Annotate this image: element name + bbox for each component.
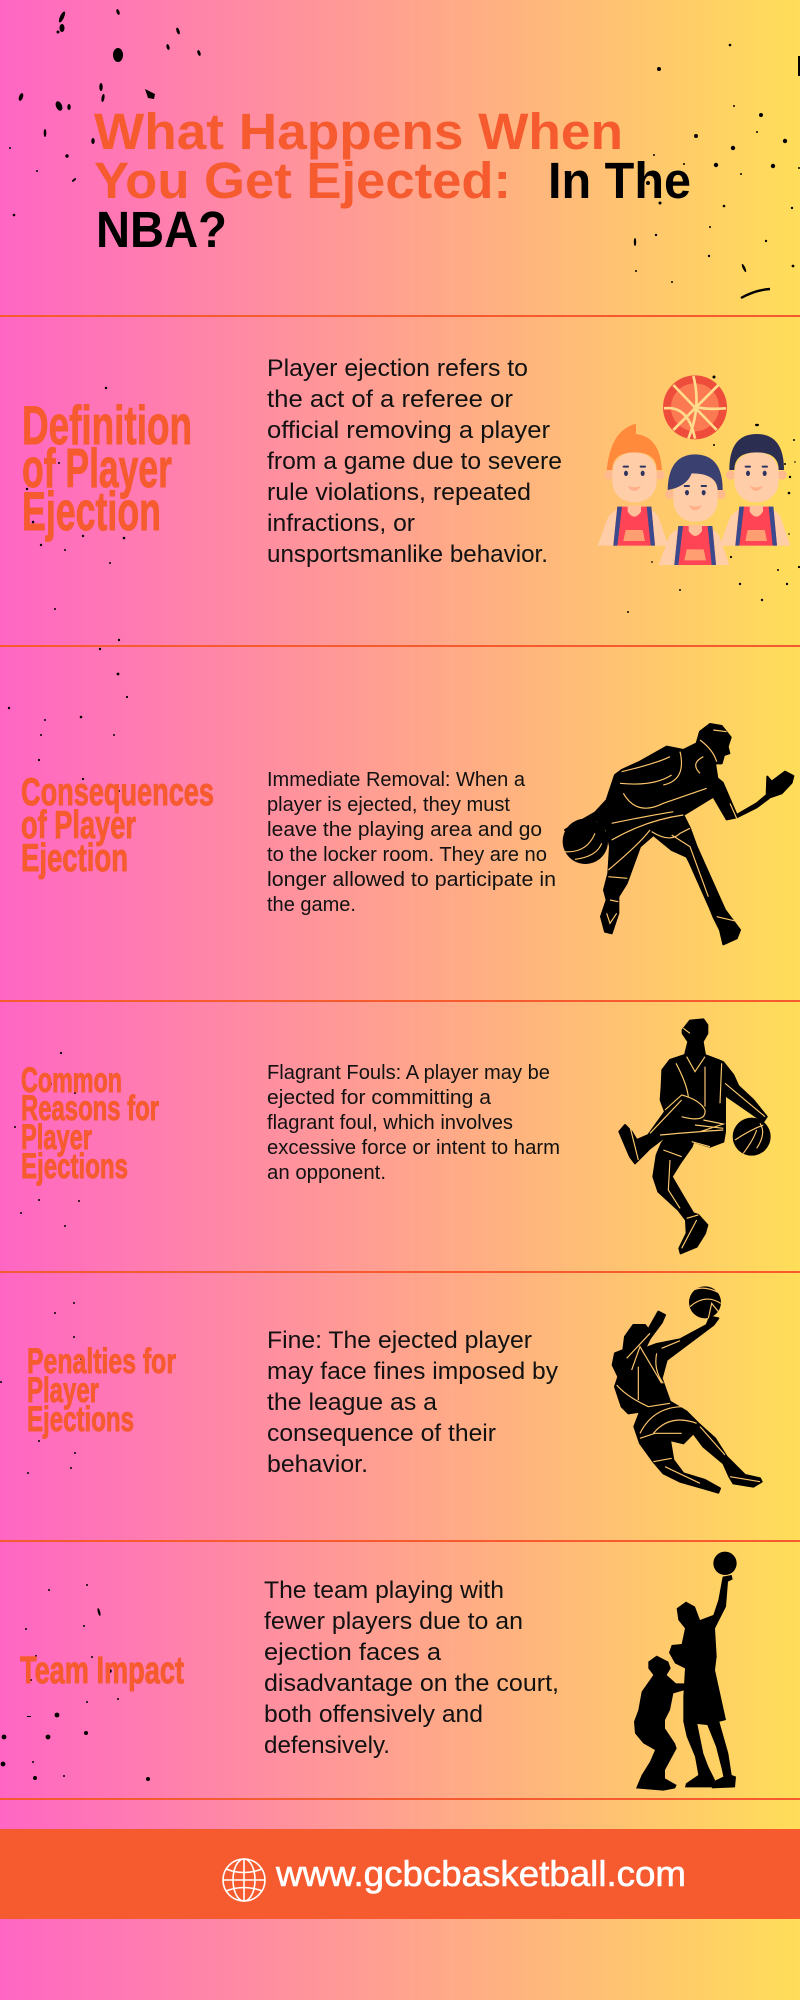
- text block: fine: Fine: The ejected player: [267, 1327, 532, 1354]
- heading: penalties: [27, 1342, 176, 1439]
- icon: player leaping for the ball: [613, 1286, 762, 1493]
- text block: definition: from a game due to severe: [267, 448, 562, 475]
- section divider lines: [0, 315, 800, 1800]
- title: NBA?: [96, 201, 227, 258]
- text block: flagrant fouls: excessive force or intent to harm: [267, 1137, 560, 1159]
- heading: common reasons: Player: [21, 1118, 92, 1157]
- text block: team impact: disadvantage on the court,: [264, 1670, 559, 1697]
- text block: team impact: defensively.: [264, 1732, 390, 1759]
- text block: consequences: leave the playing area and go: [267, 819, 542, 841]
- heading: definition: Ejection: [22, 480, 161, 542]
- heading: consequences: Ejection: [21, 837, 128, 880]
- heading: common reasons: Reasons for: [21, 1089, 159, 1128]
- heading: definition: [22, 394, 192, 542]
- title: In The: [548, 152, 691, 209]
- text block: flagrant fouls: an opponent.: [267, 1162, 386, 1184]
- text block: consequences: the game.: [267, 894, 356, 916]
- text block: team impact: ejection faces a: [264, 1639, 442, 1666]
- icon: dribbling player silhouette: [563, 724, 793, 944]
- text block: definition: infractions, or: [267, 510, 415, 537]
- text block: consequences: Immediate Removal: When a: [267, 769, 526, 791]
- text block: team impact: both offensively and: [264, 1701, 483, 1728]
- text block: flagrant fouls: Flagrant Fouls: A player may be: [267, 1062, 550, 1084]
- text block: definition: Player ejection refers to: [267, 355, 528, 382]
- heading: team impact: Team Impact: [20, 1650, 184, 1692]
- text block: flagrant fouls: flagrant foul, which involves: [267, 1112, 513, 1134]
- text block: fine: the league as a: [267, 1389, 438, 1416]
- panel: team impact: [20, 1552, 737, 1791]
- heading: common reasons: Common: [21, 1061, 122, 1100]
- text block: team impact: [264, 1577, 559, 1759]
- text block: team impact: The team playing with: [264, 1577, 504, 1604]
- footer banner: [0, 1829, 800, 1919]
- text block: definition: unsportsmanlike behavior.: [267, 541, 548, 568]
- heading: consequences: of Player: [21, 804, 136, 847]
- text block: fine: may face fines imposed by: [267, 1358, 558, 1385]
- heading: penalties: Penalties for: [27, 1342, 176, 1381]
- heading: consequences: [21, 771, 214, 880]
- heading: definition: Definition: [22, 394, 192, 456]
- text block: fine: consequence of their: [267, 1420, 496, 1447]
- heading: penalties: Ejections: [27, 1400, 134, 1439]
- text block: consequences: [267, 769, 556, 916]
- text block: consequences: to the locker room. They are no: [267, 844, 547, 866]
- title: You Get Ejected:: [94, 152, 511, 209]
- panel: penalties for player ejections: [27, 1286, 762, 1493]
- heading: definition: of Player: [22, 437, 172, 499]
- heading: common reasons: Ejections: [21, 1147, 128, 1186]
- icon: globe: [223, 1859, 265, 1901]
- panel: common reasons for player ejections: [21, 1019, 771, 1253]
- website url: www.gcbcbasketball.com: [275, 1853, 686, 1894]
- icon: player driving with raised knee: [619, 1019, 771, 1253]
- text block: consequences: player is ejected, they must: [267, 794, 510, 816]
- heading: common reasons: [21, 1061, 159, 1186]
- text block: fine: [267, 1327, 558, 1478]
- text block: fine: behavior.: [267, 1451, 368, 1478]
- text block: definition: the act of a referee or: [267, 386, 513, 413]
- icon: two players blocking silhouette: [634, 1552, 737, 1791]
- text block: definition: [267, 355, 562, 568]
- icon: three basketball kids and ball: [598, 375, 790, 565]
- heading: consequences: Consequences: [21, 771, 214, 814]
- text block: flagrant fouls: ejected for committing a: [267, 1087, 492, 1109]
- text block: flagrant fouls: [267, 1062, 560, 1184]
- text block: definition: official removing a player: [267, 417, 550, 444]
- title: [94, 103, 691, 258]
- title: What Happens When: [94, 103, 623, 160]
- text block: team impact: fewer players due to an: [264, 1608, 523, 1635]
- text block: definition: rule violations, repeated: [267, 479, 531, 506]
- panel: consequences of player ejection: [21, 724, 793, 944]
- text block: consequences: longer allowed to participate in: [267, 869, 556, 891]
- heading: penalties: Player: [27, 1371, 99, 1410]
- panel: definition of player ejection: [22, 355, 790, 568]
